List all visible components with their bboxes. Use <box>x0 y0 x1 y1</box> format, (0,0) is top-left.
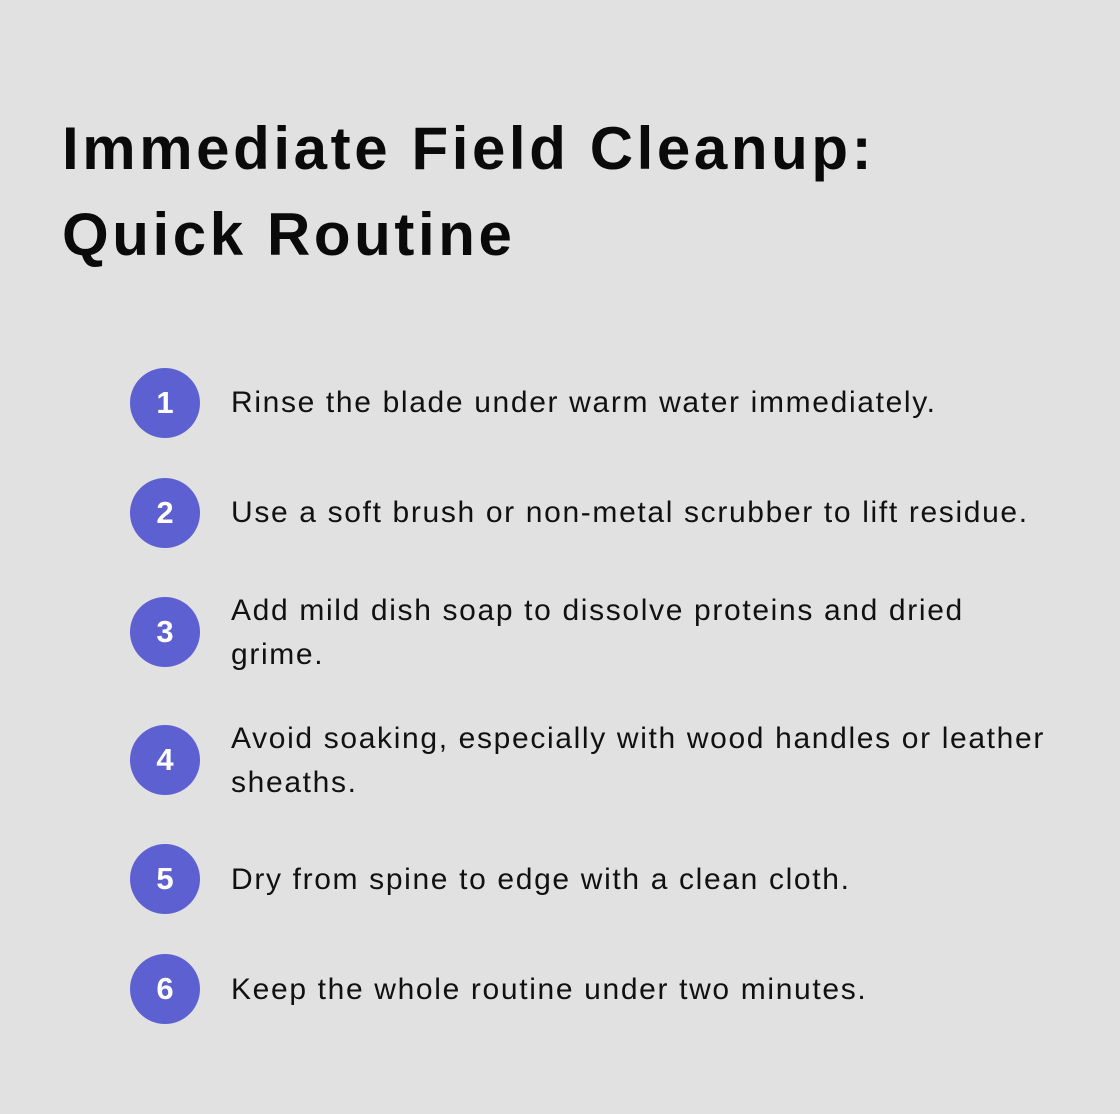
icon: number 6 <box>130 954 200 1024</box>
icon: number 1 <box>130 368 200 438</box>
icon: number 6: 6 <box>156 971 174 1006</box>
text: step 1: Rinse the blade under warm water immediately. <box>231 386 937 419</box>
text: step 5: Dry from spine to edge with a clean cloth. <box>231 863 851 896</box>
icon: number 4: 4 <box>156 742 174 777</box>
text: step 3 <box>231 594 964 671</box>
step 3 <box>130 594 964 671</box>
title: Quick Routine <box>62 201 516 268</box>
step 5 <box>130 844 851 914</box>
step 6 <box>130 954 867 1024</box>
title: Immediate Field Cleanup: <box>62 115 875 182</box>
icon: number 1: 1 <box>156 385 174 420</box>
text: step 4: sheaths. <box>231 766 358 799</box>
text: step 4 <box>231 722 1045 799</box>
step 4 <box>130 722 1045 799</box>
text: step 4: Avoid soaking, especially with wood handles or leather <box>231 722 1045 755</box>
icon: number 2 <box>130 478 200 548</box>
icon: number 4 <box>130 725 200 795</box>
icon: number 5 <box>130 844 200 914</box>
text: step 2: Use a soft brush or non-metal scrubber to lift residue. <box>231 496 1029 529</box>
step 2 <box>130 478 1029 548</box>
text: step 3: Add mild dish soap to dissolve proteins and dried <box>231 594 964 627</box>
icon: number 5: 5 <box>156 861 174 896</box>
text: step 6: Keep the whole routine under two minutes. <box>231 973 867 1006</box>
icon: number 3: 3 <box>156 614 174 649</box>
step 1 <box>130 368 937 438</box>
icon: number 2: 2 <box>156 495 174 530</box>
title <box>62 115 875 268</box>
text: step 3: grime. <box>231 638 324 671</box>
icon: number 3 <box>130 597 200 667</box>
